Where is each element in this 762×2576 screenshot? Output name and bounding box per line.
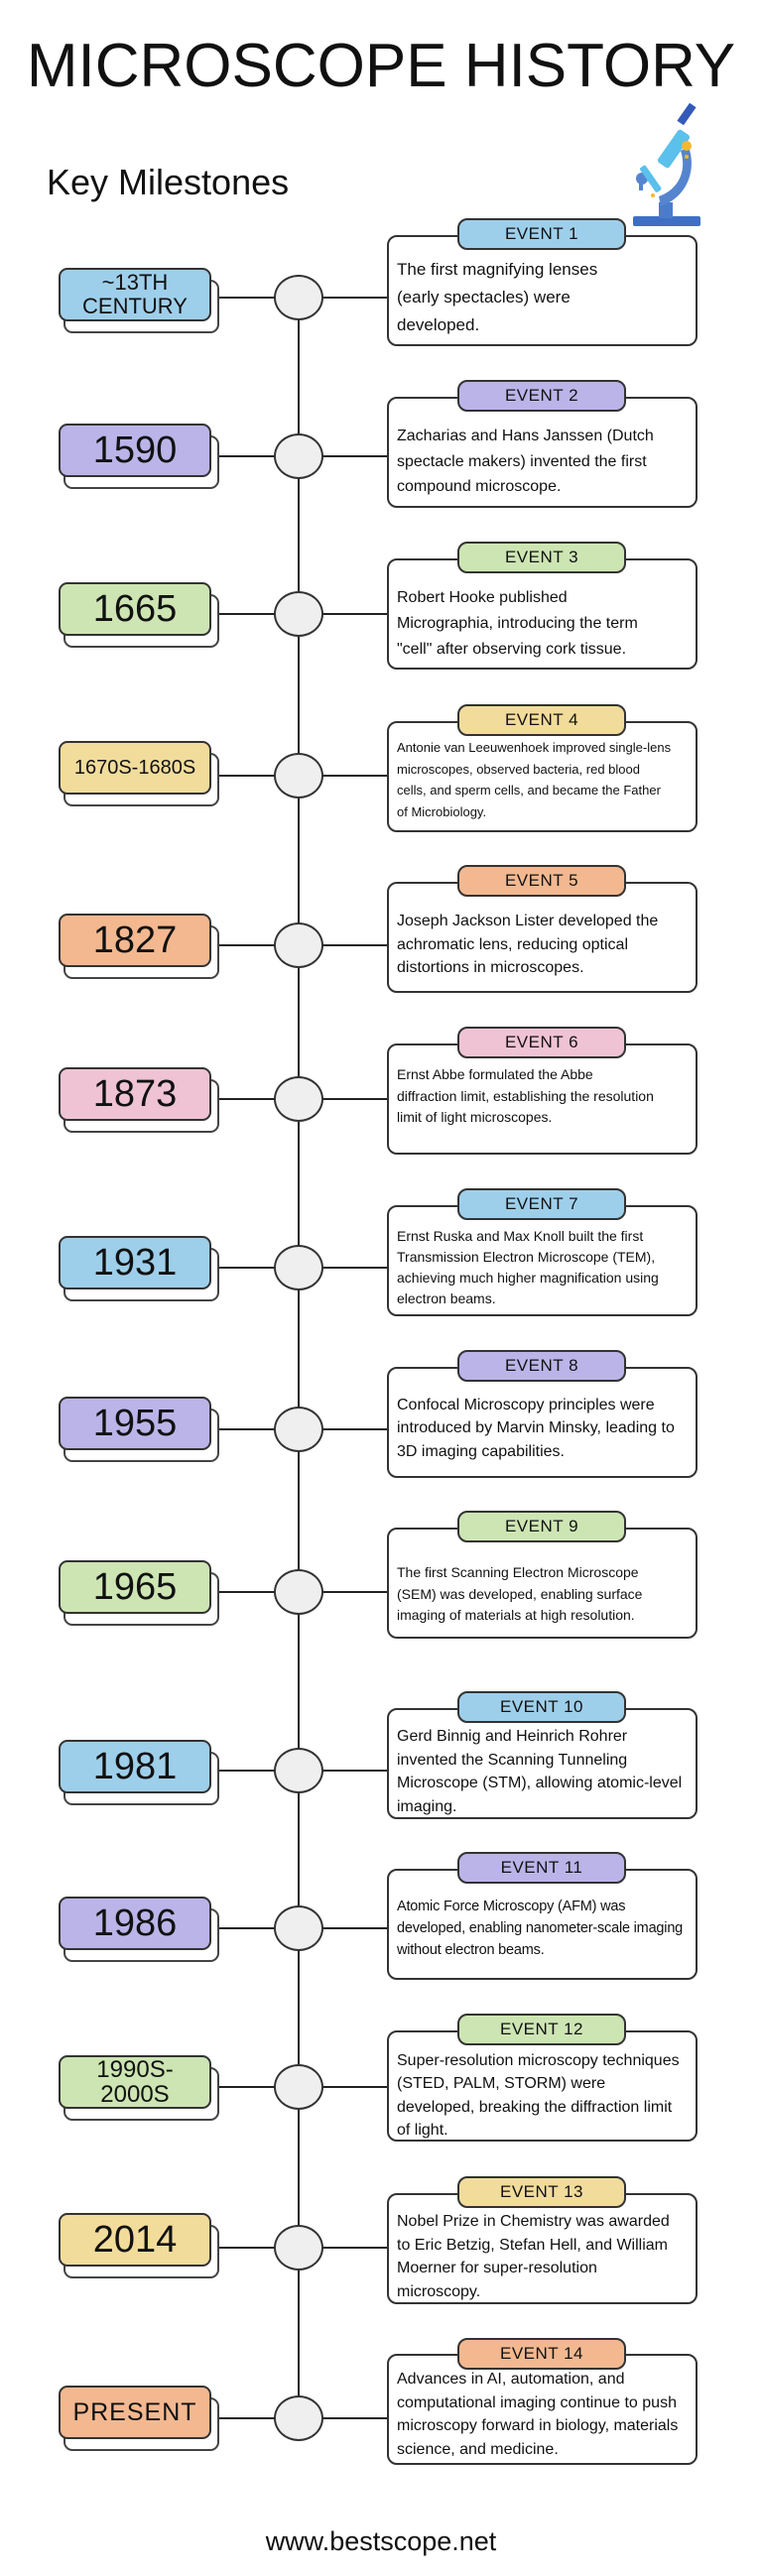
text: event 11: without electron beams. xyxy=(397,1942,545,1958)
text: event 6: diffraction limit, establishing the resolution xyxy=(397,1088,654,1104)
date: 1931 xyxy=(59,1236,211,1289)
date: 1955 xyxy=(59,1397,211,1450)
text: event 11: Atomic Force Microscopy (AFM) was xyxy=(397,1899,625,1914)
text: event 6: limit of light microscopes. xyxy=(397,1109,552,1125)
footer url: www.bestscope.net xyxy=(266,2526,496,2556)
text: event 1: (early spectacles) were xyxy=(397,288,571,307)
text: event 12: of light. xyxy=(397,2122,448,2139)
node 12 xyxy=(274,2064,323,2110)
text: event 2: compound microscope. xyxy=(397,478,561,495)
card: event 14 xyxy=(387,2354,698,2465)
tab: event 7: EVENT 7 xyxy=(505,1194,578,1213)
text: event 1: The first magnifying lenses xyxy=(397,260,597,279)
text: event 8: Confocal Microscopy principles were xyxy=(397,1397,655,1413)
text: event 14: microscopy forward in biology, materials xyxy=(397,2417,678,2434)
card: event 1 xyxy=(387,235,698,346)
text: event 9: The first Scanning Electron Microscope xyxy=(397,1564,639,1580)
node 2 xyxy=(274,433,323,479)
text: event 9: (SEM) was developed, enabling surface xyxy=(397,1586,642,1602)
date: 1873: 1873 xyxy=(93,1073,177,1115)
text: event 5: distortions in microscopes. xyxy=(397,959,584,976)
node 13 xyxy=(274,2225,323,2270)
tab: event 3: EVENT 3 xyxy=(505,548,578,566)
text: event 6 xyxy=(397,1066,654,1125)
node 1 xyxy=(274,275,323,320)
text: event 13: microscopy. xyxy=(397,2283,480,2299)
date: 1873 xyxy=(59,1067,211,1121)
text: event 10: Gerd Binnig and Heinrich Rohrer xyxy=(397,1728,627,1745)
tab: event 5: EVENT 5 xyxy=(505,871,578,890)
card: event 2 xyxy=(387,397,698,508)
node 6 xyxy=(274,1076,323,1122)
text: event 12: (STED, PALM, STORM) were xyxy=(397,2075,605,2092)
text: event 9 xyxy=(397,1564,642,1623)
subtitle: Key Milestones: Key Milestones xyxy=(47,162,289,202)
card: event 4 xyxy=(387,721,698,832)
card: event 12 xyxy=(387,2030,698,2142)
tab: event 13 xyxy=(457,2176,626,2208)
text: event 7: achieving much higher magnification using xyxy=(397,1270,659,1286)
card: event 7 xyxy=(387,1205,698,1316)
tab: event 10: EVENT 10 xyxy=(500,1697,583,1716)
node 14 xyxy=(274,2395,323,2441)
text: event 14 xyxy=(397,2371,678,2458)
text: event 10: Microscope (STM), allowing atomic-level xyxy=(397,1775,682,1791)
date: ~13th century: CENTURY xyxy=(82,294,188,318)
text: event 10: imaging. xyxy=(397,1798,456,1815)
date: 1990s-2000s xyxy=(59,2055,211,2109)
text: event 13 xyxy=(397,2213,670,2299)
node 7 xyxy=(274,1245,323,1290)
card: event 6 xyxy=(387,1043,698,1155)
date: present xyxy=(59,2386,211,2439)
tab: event 14 xyxy=(457,2338,626,2370)
text: event 11 xyxy=(397,1899,683,1958)
text: event 4: of Microbiology. xyxy=(397,803,486,819)
node 11 xyxy=(274,1905,323,1951)
date: 1670s-1680s: 1670S-1680S xyxy=(74,757,195,779)
tab: event 12: EVENT 12 xyxy=(500,2020,583,2038)
card: event 10 xyxy=(387,1708,698,1819)
tab: event 9 xyxy=(457,1511,626,1542)
text: event 3: "cell" after observing cork tissue. xyxy=(397,641,626,658)
text: event 10: invented the Scanning Tunneling xyxy=(397,1752,627,1769)
text: event 7: Transmission Electron Microscope (TEM), xyxy=(397,1249,655,1265)
node 8 xyxy=(274,1407,323,1452)
tab: event 8: EVENT 8 xyxy=(505,1356,578,1375)
text: event 7 xyxy=(397,1228,659,1306)
date: 1955: 1955 xyxy=(93,1403,177,1444)
text: event 2: Zacharias and Hans Janssen (Dutch xyxy=(397,428,654,444)
text: event 2: spectacle makers) invented the first xyxy=(397,452,647,470)
node 5 xyxy=(274,922,323,968)
date: 1827 xyxy=(59,914,211,967)
tab: event 6 xyxy=(457,1027,626,1058)
text: event 14: science, and medicine. xyxy=(397,2440,559,2458)
date: 1590 xyxy=(59,424,211,477)
tab: event 7 xyxy=(457,1188,626,1220)
date: ~13th century: ~13TH xyxy=(102,270,168,295)
text: event 13: to Eric Betzig, Stefan Hell, and William xyxy=(397,2236,668,2254)
text: event 7: electron beams. xyxy=(397,1290,496,1306)
text: event 4: microscopes, observed bacteria, red blood xyxy=(397,762,640,776)
text: event 11: developed, enabling nanometer-scale imaging xyxy=(397,1920,683,1936)
date: 1990s-2000s: 2000S xyxy=(100,2081,170,2108)
tab: event 12 xyxy=(457,2014,626,2045)
text: event 7: Ernst Ruska and Max Knoll built the first xyxy=(397,1228,643,1244)
title: MICROSCOPE HISTORY xyxy=(27,32,735,100)
text: event 8: introduced by Marvin Minsky, leading to xyxy=(397,1419,675,1436)
tab: event 4: EVENT 4 xyxy=(505,710,578,729)
text: event 1: developed. xyxy=(397,315,479,334)
text: event 13: Moerner for super-resolution xyxy=(397,2260,597,2276)
date: present: PRESENT xyxy=(72,2398,197,2426)
date: 1665 xyxy=(59,582,211,636)
text: event 10 xyxy=(397,1728,682,1815)
tab: event 9: EVENT 9 xyxy=(505,1517,578,1535)
node 4 xyxy=(274,753,323,798)
date: 1965: 1965 xyxy=(93,1566,177,1608)
text: event 13: Nobel Prize in Chemistry was awarded xyxy=(397,2213,670,2230)
text: event 4: cells, and sperm cells, and became the Father xyxy=(397,783,661,797)
text: event 1 xyxy=(397,260,597,334)
text: event 3: Micrographia, introducing the term xyxy=(397,615,638,632)
tab: event 8 xyxy=(457,1350,626,1382)
tab: event 11: EVENT 11 xyxy=(501,1858,582,1877)
text: event 8 xyxy=(397,1397,675,1460)
text: event 14: Advances in AI, automation, and xyxy=(397,2371,624,2388)
tab: event 10 xyxy=(457,1691,626,1723)
date: ~13th century xyxy=(59,268,211,321)
card: event 11 xyxy=(387,1869,698,1980)
tab: event 11 xyxy=(457,1852,626,1884)
card: event 9 xyxy=(387,1528,698,1639)
node 3 xyxy=(274,591,323,637)
text: event 8: 3D imaging capabilities. xyxy=(397,1443,565,1460)
node 10 xyxy=(274,1748,323,1793)
tab: event 4 xyxy=(457,704,626,736)
card: event 3 xyxy=(387,558,698,670)
tab: event 6: EVENT 6 xyxy=(505,1033,578,1051)
date: 1986 xyxy=(59,1897,211,1950)
text: event 2 xyxy=(397,428,654,495)
date: 1931: 1931 xyxy=(93,1242,177,1284)
tab: event 13: EVENT 13 xyxy=(500,2182,583,2201)
date: 1981 xyxy=(59,1740,211,1793)
text: event 3 xyxy=(397,589,638,658)
tab: event 1: EVENT 1 xyxy=(505,224,578,243)
text: event 4 xyxy=(397,740,671,819)
date: 1670s-1680s xyxy=(59,741,211,795)
date: 1990s-2000s: 1990S- xyxy=(96,2056,174,2083)
date: 1665: 1665 xyxy=(93,588,177,630)
date: 1986: 1986 xyxy=(93,1902,177,1944)
tab: event 1 xyxy=(457,218,626,250)
date: 1965 xyxy=(59,1560,211,1614)
icon: microscope xyxy=(633,103,700,226)
date: 1981: 1981 xyxy=(93,1746,177,1787)
timeline line xyxy=(298,298,300,2418)
date: 1590: 1590 xyxy=(93,429,177,471)
card: event 5 xyxy=(387,882,698,993)
tab: event 14: EVENT 14 xyxy=(500,2344,583,2363)
date: 2014: 2014 xyxy=(93,2219,177,2261)
text: event 5 xyxy=(397,913,658,976)
card: event 8 xyxy=(387,1367,698,1478)
text: event 12: Super-resolution microscopy techniques xyxy=(397,2052,680,2069)
text: event 9: imaging of materials at high resolution. xyxy=(397,1607,635,1623)
text: event 5: Joseph Jackson Lister developed the xyxy=(397,913,658,929)
tab: event 2: EVENT 2 xyxy=(505,386,578,405)
text: event 12 xyxy=(397,2052,680,2139)
tab: event 3 xyxy=(457,542,626,573)
text: event 5: achromatic lens, reducing optical xyxy=(397,936,628,953)
date: 1827: 1827 xyxy=(93,920,177,961)
text: event 4: Antonie van Leeuwenhoek improved single-lens xyxy=(397,740,671,755)
date: 2014 xyxy=(59,2213,211,2267)
text: event 12: developed, breaking the diffraction limit xyxy=(397,2099,672,2116)
text: event 6: Ernst Abbe formulated the Abbe xyxy=(397,1066,593,1082)
text: event 14: computational imaging continue to push xyxy=(397,2394,677,2410)
tab: event 5 xyxy=(457,865,626,897)
text: event 3: Robert Hooke published xyxy=(397,589,568,606)
tab: event 2 xyxy=(457,380,626,412)
node 9 xyxy=(274,1569,323,1615)
card: event 13 xyxy=(387,2193,698,2304)
